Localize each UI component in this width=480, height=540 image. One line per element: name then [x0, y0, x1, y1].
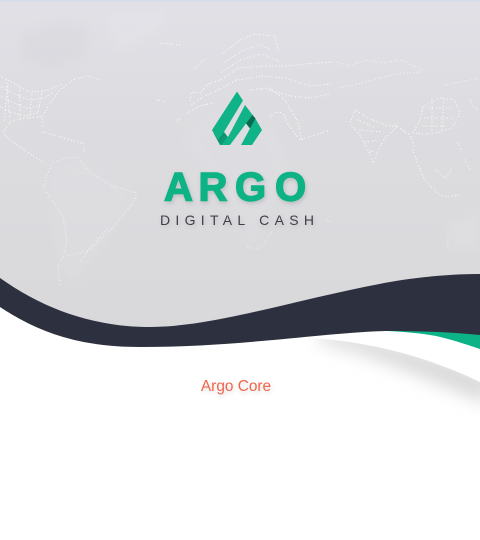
- map background: [0, 0, 480, 350]
- faint landmasses: [20, 10, 480, 285]
- Russia: [337, 60, 480, 88]
- fold: [212, 130, 228, 145]
- left strip: [212, 92, 243, 143]
- India and China: [350, 98, 478, 197]
- green accent band: [388, 330, 480, 349]
- label: Argo Core: Argo Core: [201, 378, 271, 395]
- city lights: dotted coastlines and regions: [0, 34, 480, 285]
- Africa and Australia: [247, 220, 448, 249]
- middle strip: [221, 105, 253, 145]
- wordmark: ARGO: ARGO: [164, 166, 306, 210]
- North America: [0, 76, 100, 162]
- South America: [43, 157, 137, 285]
- dark inner fold: [246, 115, 256, 128]
- curl shadow: [320, 330, 480, 404]
- cover illustration: [0, 0, 480, 406]
- Europe: [157, 34, 333, 142]
- right strip: [241, 118, 262, 145]
- logo mark: [212, 92, 262, 145]
- dark navy wave: [0, 274, 480, 347]
- white page curve: [0, 300, 480, 540]
- tagline: DIGITAL CASH: [160, 212, 314, 228]
